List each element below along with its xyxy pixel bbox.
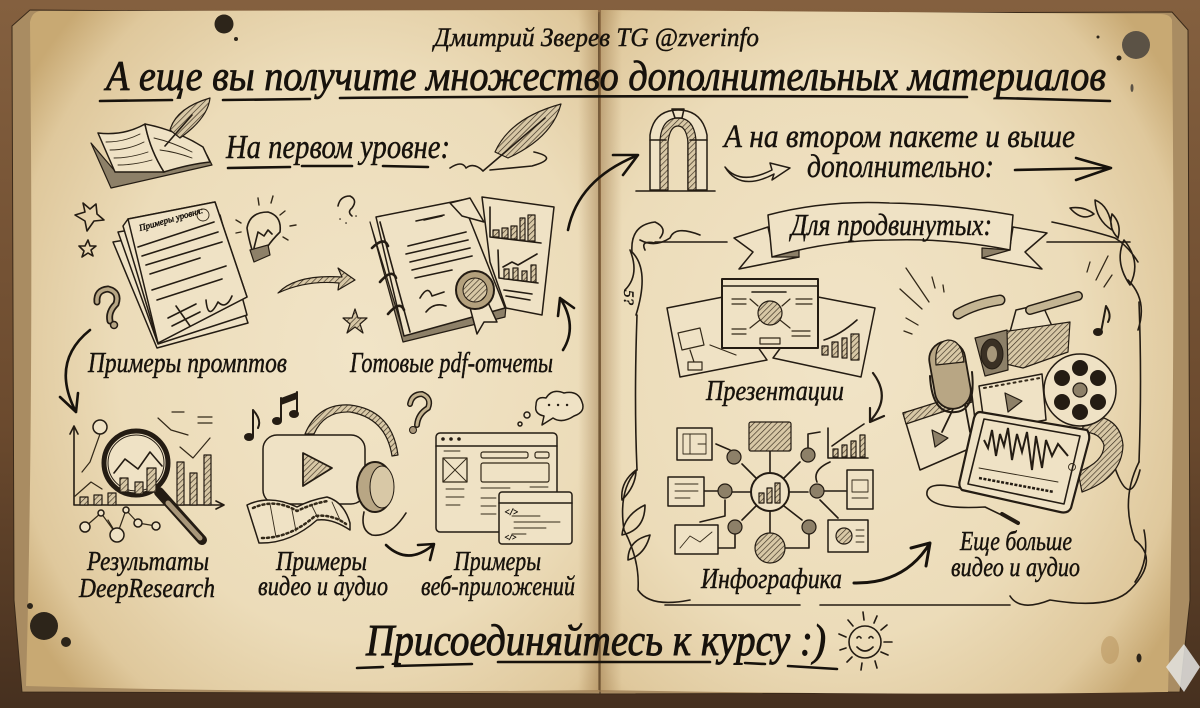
arrow: presentations to infographic <box>870 373 884 422</box>
icon: small question mark <box>338 196 356 223</box>
label: video and audio examples <box>258 546 388 601</box>
icon: arch <box>636 109 715 191</box>
heading: second package: А на втором пакете и выше <box>722 119 1075 155</box>
panel: advanced frame <box>620 200 1146 605</box>
illustration: web app windows <box>436 433 572 544</box>
label: web app examples: Примеры <box>453 546 541 576</box>
arrow: infographic to video <box>854 543 930 583</box>
label: more video and audio: видео и аудио <box>951 552 1080 582</box>
icon: question mark big <box>410 394 429 434</box>
icon: quill pen <box>450 104 561 171</box>
icon: chart sheet <box>482 197 554 315</box>
author line: Дмитрий Зверев TG @zverinfo <box>431 23 759 52</box>
label: web app examples <box>421 546 575 601</box>
label: more video and audio: Еще больше <box>959 526 1072 556</box>
illustration: prompt sheets <box>113 202 248 348</box>
icon: thought bubble <box>518 391 583 426</box>
icon: large question mark <box>97 289 118 328</box>
label: deep research: Результаты <box>86 546 209 576</box>
heading: second package: дополнительно: <box>807 149 994 185</box>
arrow: curved down to research <box>60 330 90 412</box>
icon: music note <box>1093 306 1110 336</box>
heading: first level: На первом уровне: <box>225 129 450 166</box>
label: prompts: Примеры промптов <box>87 348 287 379</box>
call to action: Присоединяйтесь к курсу :) <box>365 616 826 665</box>
label: more video and audio <box>951 526 1080 582</box>
banner: for advanced <box>734 202 1047 269</box>
icon: music notes <box>244 392 299 441</box>
arrow: small right <box>725 163 790 182</box>
label: deep research: DeepResearch <box>78 573 215 603</box>
icon: smiling sun <box>839 612 892 670</box>
banner: for advanced: Для продвинутых: <box>789 207 992 242</box>
illustration: video player with headphones <box>247 405 406 543</box>
illustration: prompt sheets: Примеры уровня: <box>137 205 204 233</box>
icon: star <box>343 309 367 333</box>
panel: advanced frame: 5? <box>620 290 636 306</box>
title: А еще вы получите множество дополнительных материалов <box>103 54 1106 100</box>
arrow: up to pdf <box>558 298 574 350</box>
label: deep research <box>78 546 215 603</box>
illustration: pdf report binder <box>370 198 506 342</box>
label: presentations: Презентации <box>705 375 844 407</box>
illustration: web app windows: </> <box>504 507 519 517</box>
label: video and audio examples: видео и аудио <box>258 571 388 601</box>
icon: light bulb <box>236 196 296 262</box>
label: video and audio examples: Примеры <box>275 546 367 576</box>
label: infographic: Инфографика <box>700 563 842 595</box>
label: pdf reports: Готовые pdf-отчеты <box>349 348 553 379</box>
arrow: big to arch <box>568 155 638 230</box>
arrow: prompts to pdf <box>278 268 355 293</box>
heading: second package <box>722 119 1075 185</box>
illustration: web app windows: </> <box>504 533 517 542</box>
arrow: to web apps <box>386 544 434 560</box>
icon: stars <box>75 203 104 257</box>
icon: open book with quill <box>91 98 212 188</box>
illustration: deep research chart <box>70 412 224 542</box>
arrow: long right <box>1015 158 1111 180</box>
icon: wax seal with ribbon <box>456 271 497 334</box>
illustration: infographic network <box>668 422 873 563</box>
illustration: presentation slides <box>667 279 875 377</box>
label: web app examples: веб-приложений <box>421 571 575 601</box>
illustration: video camera, microphone, reel, tablet <box>900 256 1123 523</box>
